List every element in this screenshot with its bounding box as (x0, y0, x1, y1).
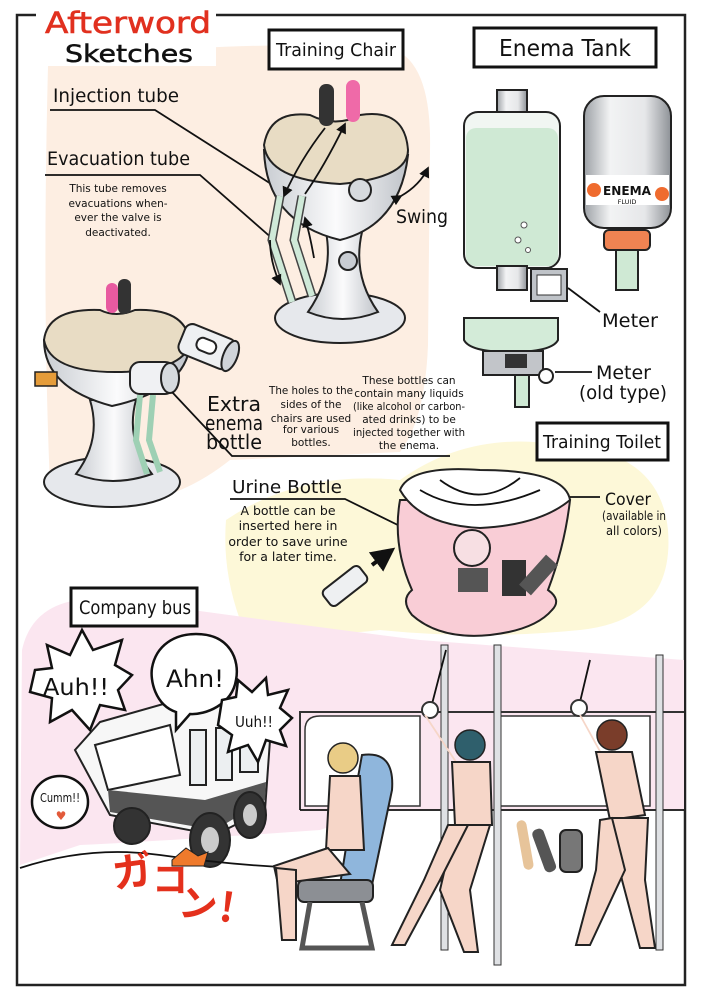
speech bubble: Cumm: Cumm!! (40, 790, 80, 805)
label: injection tube (50, 85, 290, 196)
heading: enema tank: Enema Tank (499, 36, 632, 62)
text: holes note (268, 385, 353, 449)
text: evacuation tube description: deactivated. (85, 227, 151, 239)
text: holes note: sides of the (280, 399, 342, 411)
text: bottles note (353, 375, 465, 452)
text: holes note: The holes to the (268, 385, 353, 397)
text: evacuation tube description: This tube removes (68, 183, 167, 195)
text: urine bottle description: inserted here in (239, 518, 337, 533)
label: urine bottle: Urine Bottle (232, 477, 342, 498)
text: urine bottle description: for a later time. (239, 549, 337, 564)
background tint: chair section (45, 45, 430, 505)
label: meter old type: (old type) (579, 382, 667, 404)
illustration: neutral seated passenger (274, 743, 364, 940)
heading: company bus (71, 588, 197, 626)
text: bottles note: These bottles can (361, 375, 456, 387)
illustration: meter (531, 269, 600, 312)
heading: training chair: Training Chair (275, 40, 397, 61)
sound effect: コ (152, 851, 188, 903)
label: urine bottle (230, 477, 408, 530)
sound effect (108, 837, 239, 934)
text: bottles note: injected together with (353, 427, 465, 439)
label: cover (602, 490, 666, 538)
label: extra enema bottle: bottle (206, 430, 262, 454)
text: evacuation tube description (68, 183, 168, 239)
title: Sketches (65, 40, 193, 68)
illustration: enema fluid canister: FLUID (618, 198, 636, 206)
speech bubble: Cumm (32, 776, 88, 828)
text: bottles note: the enema. (379, 440, 439, 452)
text: urine bottle description (228, 503, 348, 564)
label: cover: (available in (602, 508, 666, 523)
speech bubble: Auh: Auh!! (43, 675, 109, 701)
text: holes note: bottles. (291, 437, 331, 449)
label: extra enema bottle (172, 392, 450, 456)
text: urine bottle description: order to save urine (228, 534, 348, 549)
background tint: bus section (20, 599, 684, 865)
illustration: pole attachment (516, 820, 582, 874)
text: bottles note: ated drinks) to be (362, 414, 456, 426)
illustration: enema fluid canister: ENEMA (603, 183, 651, 198)
illustration: neutral standing passenger, centre (392, 715, 492, 952)
illustration: bus exterior (20, 695, 300, 868)
title: Afterword (45, 6, 211, 40)
label: injection tube: Injection tube (53, 85, 179, 107)
illustration: training chair side (35, 279, 190, 507)
illustration: urine bottle with arrow (321, 550, 392, 608)
illustration: bus seat (298, 754, 392, 948)
sound effect: ガ (108, 837, 156, 900)
text: bottles note: contain many liquids (354, 388, 464, 400)
text: evacuation tube description: evacuations when- (68, 198, 168, 210)
background tint: toilet section (225, 442, 668, 635)
label: meter old type: Meter (596, 362, 651, 384)
text: urine bottle description: A bottle can be (240, 503, 336, 518)
label: extra enema bottle: Extra (207, 392, 261, 416)
speech bubble: Uuh (218, 678, 292, 762)
sound effect: ン (175, 871, 222, 932)
speech bubble: Cumm: ♥ (56, 809, 66, 823)
heading: training toilet: Training Toilet (542, 432, 661, 453)
heading: training toilet (537, 423, 668, 460)
label: swing: Swing (396, 206, 448, 228)
illustration: enema tank cylinder (464, 90, 560, 290)
text: evacuation tube description: ever the valve is (74, 212, 162, 224)
illustration: old type meter (464, 318, 592, 407)
illustration: bus interior windows and poles (300, 645, 684, 965)
text: holes note: chairs are used (271, 413, 351, 425)
speech bubble: Ahn: Ahn! (166, 665, 224, 693)
label: meter: Meter (602, 310, 658, 332)
illustration: neutral standing passenger, right (576, 715, 655, 948)
text: holes note: for various (283, 424, 339, 436)
sound effect: ! (216, 875, 239, 934)
label: cover: all colors) (606, 523, 662, 538)
speech bubble: Ahn (152, 634, 237, 730)
illustration: training chair front (264, 80, 408, 343)
illustration: extra bottle (176, 322, 243, 373)
heading: enema tank (474, 28, 656, 67)
heading: company bus: Company bus (79, 597, 191, 619)
label: swing (396, 168, 448, 228)
illustration: training toilet (398, 469, 600, 636)
label: extra enema bottle: enema (205, 411, 263, 435)
label: evacuation tube: Evacuation tube (47, 148, 190, 170)
speech bubble: Auh (30, 630, 132, 730)
text: bottles note: (like alcohol or carbon- (353, 401, 465, 413)
speech bubble: Uuh: Uuh!! (235, 713, 273, 731)
heading: training chair (269, 30, 403, 69)
title (36, 4, 216, 68)
label: evacuation tube (45, 148, 274, 240)
label: cover: Cover (605, 490, 651, 510)
illustration: enema fluid canister (584, 96, 671, 290)
label: meter old type (579, 362, 667, 404)
